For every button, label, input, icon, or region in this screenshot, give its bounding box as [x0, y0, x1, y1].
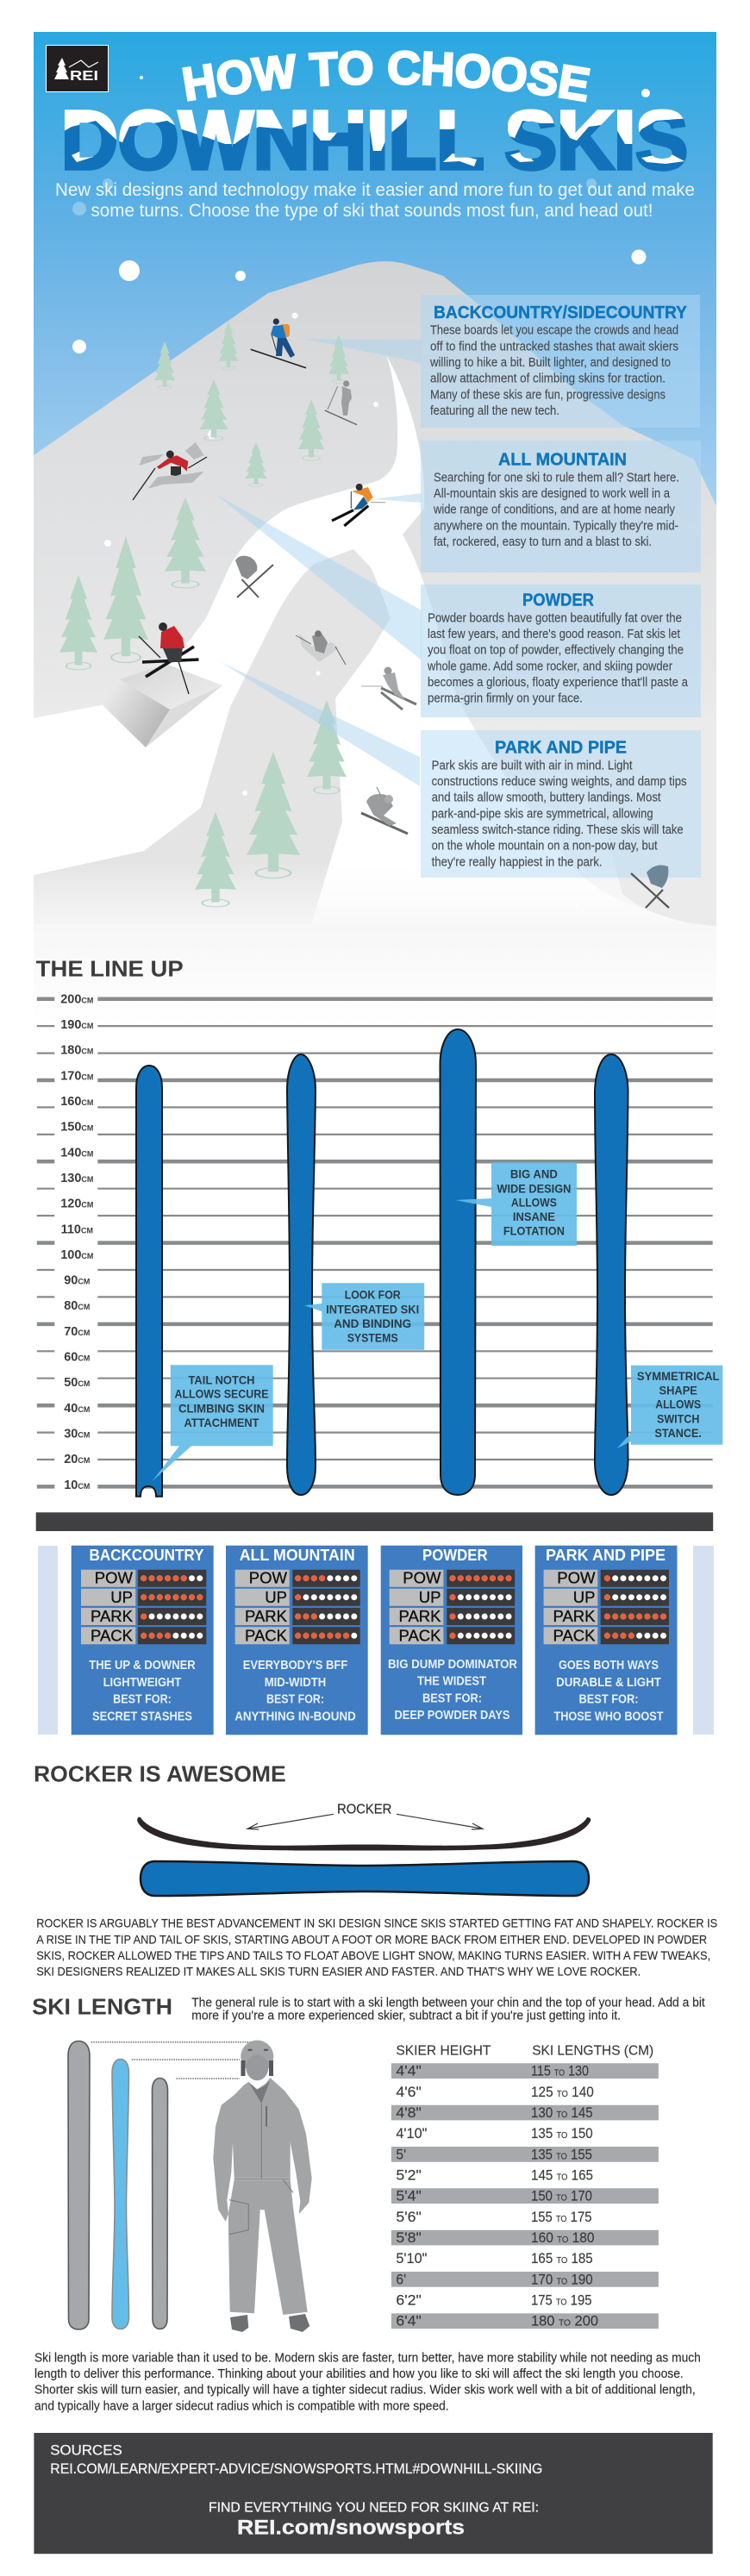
table: ski lengths: 160 TO 180 [531, 2229, 595, 2246]
chart: ruler labels: 10CM [64, 1479, 90, 1492]
chart: ruler labels: 60CM [64, 1350, 90, 1364]
table: ski lengths: SKI LENGTHS (CM) [532, 2043, 653, 2058]
panel: all mountain: All-mountain skis are designed to work well in a [434, 486, 671, 501]
panel: backcountry: willing to hike a bit. Built lighter, and designed to [429, 355, 671, 370]
panel: powder ratings card: PARK [398, 1607, 441, 1625]
ski: powder [440, 1029, 476, 1495]
right side grey strip [576, 718, 716, 926]
panel: park and pipe ratings card: PARK AND PIPE [546, 1546, 666, 1564]
skier: grey park [361, 787, 408, 834]
panel: powder: you float on top of powder, effectively changing the [428, 643, 684, 658]
table: ski lengths: 5'6" [396, 2209, 422, 2225]
callout: big and wide: FLOTATION [503, 1225, 565, 1238]
table: ski lengths: 135 TO 150 [531, 2125, 593, 2141]
panel: backcountry ratings card: POW [95, 1569, 134, 1587]
panel: backcountry ratings card: BACKCOUNTRY [90, 1546, 204, 1564]
table: ski lengths: SKIER HEIGHT [396, 2043, 491, 2058]
panel: backcountry: These boards let you escape the crowds and head [430, 323, 678, 338]
panel: all mountain ratings card: ALL MOUNTAIN [240, 1546, 355, 1564]
panel: all mountain ratings card: UP [265, 1588, 287, 1606]
trees [59, 322, 349, 907]
skier: red jumper [139, 622, 198, 694]
panel: park and pipe ratings card: UP [573, 1588, 595, 1606]
panel: all mountain ratings card: MID-WIDTH [265, 1676, 326, 1690]
panel: backcountry ratings card: PACK [91, 1626, 134, 1645]
heading: the line up: THE LINE UP [36, 955, 184, 981]
panel: powder: Powder boards have gotten beautifully fat over the [428, 610, 682, 625]
table: ski lengths: 4'6" [396, 2084, 422, 2100]
chart: ruler labels: 190CM [60, 1018, 93, 1032]
callout: big and wide [455, 1162, 577, 1246]
title: downhill skis [64, 109, 687, 172]
skier: grey touring [325, 380, 357, 425]
panel: park and pipe ratings card: BEST FOR: [579, 1693, 638, 1707]
panel: backcountry: Many of these skis are fun, progressive designs [430, 387, 666, 402]
skier: red in spray [133, 442, 207, 500]
chart: ruler labels: 40CM [64, 1402, 90, 1416]
skier: grey-blue bottom [631, 866, 669, 908]
chart: ruler labels: 90CM [64, 1274, 90, 1288]
table: ski lengths: 6'4" [396, 2313, 422, 2329]
callout: look for [304, 1283, 424, 1350]
panel: powder ratings card: BIG DUMP DOMINATOR [388, 1658, 517, 1672]
panel: park and pipe ratings card: GOES BOTH WAYS [559, 1659, 659, 1673]
panel: all mountain ratings card [226, 1546, 368, 1735]
panel: all mountain ratings card: POW [249, 1569, 288, 1587]
table: ski lengths: 170 TO 190 [531, 2271, 593, 2287]
arrows [247, 1814, 483, 1829]
panel: park and pipe ratings card [535, 1546, 678, 1735]
ski length intro [191, 1995, 706, 2023]
ski length paragraph: Ski length is more variable than it used to be. Modern skis are faster, turn better, have more stability while not needing as much [34, 2350, 701, 2365]
chart: ruler labels: 160CM [60, 1095, 93, 1109]
table: ski lengths: 5'10" [396, 2250, 427, 2267]
white ski run [34, 355, 690, 924]
ski: backcountry [136, 1066, 162, 1497]
table: ski lengths: 145 TO 165 [531, 2167, 593, 2184]
side strip left [38, 1546, 58, 1735]
chart: ruler labels: 20CM [64, 1453, 90, 1466]
call to action: FIND EVERYTHING YOU NEED FOR SKIING AT REI: [209, 2500, 539, 2515]
table: ski lengths: 135 TO 155 [531, 2146, 592, 2162]
panel: backcountry ratings card: LIGHTWEIGHT [103, 1676, 181, 1690]
table: ski lengths [391, 2043, 659, 2329]
panel: powder: last few years, and there's good reason. Fat skis let [428, 627, 681, 641]
chart: ruler labels: 30CM [64, 1428, 90, 1441]
rocker paragraph: SKIS, ROCKER ALLOWED THE TIPS AND TAILS TO FLOAT ABOVE LIGHT SNOW, MAKING TURNS EASIER. WITH A FEW TWEAKS, [36, 1948, 710, 1962]
jacket [213, 2078, 312, 2222]
chart: ruler labels: 50CM [64, 1376, 90, 1390]
panel: park and pipe: park-and-pipe skis are symmetrical, allowing [432, 806, 653, 821]
icon: REI logo [47, 45, 109, 91]
panel: powder ratings card: UP [419, 1588, 441, 1606]
chart: ruler labels: 120CM [60, 1197, 93, 1211]
callout: big and wide: BIG AND [510, 1168, 558, 1181]
panel: backcountry ratings card: PARK [91, 1607, 134, 1625]
callout: symmetrical: SYMMETRICAL [637, 1370, 719, 1383]
panel: backcountry ratings card: THE UP & DOWNER [89, 1659, 196, 1673]
panel: all mountain ratings card: BEST FOR: [266, 1693, 324, 1707]
sky background [34, 32, 716, 566]
panel: all mountain [421, 441, 701, 572]
callout: symmetrical: SHAPE [659, 1384, 697, 1397]
callout: big and wide: INSANE [513, 1210, 555, 1223]
panel: park and pipe: and tails allow smooth, buttery landings. Most [432, 791, 661, 805]
panel: park and pipe [421, 730, 701, 878]
skis by height [68, 2041, 167, 2329]
helmet [241, 2040, 273, 2073]
callout: look for: SYSTEMS [347, 1331, 398, 1344]
ski length intro: more if you're a more experienced skier, subtract a bit if you're just getting into it. [191, 2009, 621, 2023]
label: rocker: ROCKER [337, 1802, 391, 1816]
panel: park and pipe ratings card: PACK [553, 1626, 596, 1645]
panel: all mountain: ALL MOUNTAIN [498, 449, 627, 469]
ski length paragraph [34, 2350, 701, 2414]
callout: tail notch: ATTACHMENT [184, 1416, 259, 1429]
chart: ruler labels: 180CM [60, 1044, 93, 1058]
rocker paragraph [36, 1916, 717, 1979]
panel: backcountry: BACKCOUNTRY/SIDECOUNTRY [434, 303, 687, 322]
panel: all mountain: wide range of conditions, and are at home nearly [433, 503, 675, 517]
table: ski lengths: 6' [396, 2271, 406, 2287]
callout: tail notch: ALLOWS SECURE [174, 1388, 269, 1401]
table: ski lengths: 125 TO 140 [531, 2084, 594, 2100]
dotted guide lines [91, 2042, 252, 2079]
table: ski lengths: 6'2" [396, 2292, 422, 2309]
icon: REI logo: REI [70, 69, 98, 84]
panel: all mountain: fat, rockered, easy to turn and a blast to ski. [434, 535, 652, 549]
panel: all mountain ratings card: ANYTHING IN-BOUND [234, 1710, 356, 1723]
title: downhill skis: DOWNHILL SKIS [61, 95, 688, 186]
skier: backcountry blue [251, 318, 306, 368]
panel: powder [421, 585, 701, 717]
panel: all mountain ratings card: PACK [245, 1626, 288, 1645]
panel: park and pipe: Park skis are built with air in mind. Light [432, 758, 633, 772]
panel: all mountain ratings card: EVERYBODY'S BFF [243, 1659, 347, 1673]
panel: powder ratings card: POW [403, 1569, 441, 1587]
callout: look for: INTEGRATED SKI [326, 1303, 419, 1316]
panel: all mountain: anywhere on the mountain. Typically they're mid- [434, 518, 678, 533]
panel: park and pipe: they're really happiest in the park. [432, 854, 603, 869]
chart: ruler labels [60, 992, 93, 1492]
panel: park and pipe: seamless switch-stance riding. These skis will take [432, 822, 684, 837]
chart: ruler labels: 130CM [60, 1172, 93, 1185]
panel: park and pipe ratings card: PARK [553, 1607, 596, 1625]
panel: backcountry: off to find the untracked stashes that await skiers [430, 340, 678, 354]
title: downhill skis: DOWNHILL SKIS [61, 95, 688, 186]
sources: SOURCES [50, 2442, 122, 2459]
ski length paragraph: length to deliver this performance. Thinking about your abilities and how you like to ski will affect the ski length you choose. [34, 2367, 684, 2381]
panel: powder ratings card: BEST FOR: [422, 1691, 482, 1705]
callout: symmetrical [617, 1366, 722, 1448]
heading: ski length: SKI LENGTH [32, 1994, 172, 2020]
table: ski lengths: 4'4" [396, 2063, 422, 2079]
panel: park and pipe: PARK AND PIPE [495, 737, 627, 757]
callout: tail notch: CLIMBING SKIN [178, 1402, 265, 1415]
panel: all mountain ratings card: PARK [245, 1607, 288, 1625]
chart: ruler labels: 100CM [60, 1248, 93, 1262]
panel: park and pipe ratings card: POW [557, 1569, 596, 1587]
ski: park and pipe [595, 1054, 628, 1495]
panel: backcountry: featuring all the new tech. [430, 403, 559, 418]
chart: ruler grid [37, 999, 713, 1486]
lower fade [34, 862, 716, 1026]
dark divider bar [36, 1512, 713, 1531]
rocker paragraph: SKI DESIGNERS REALIZED IT MAKES ALL SKIS TURN EASIER AND FASTER. AND THAT'S WHY WE LOVE ROCKER. [36, 1965, 641, 1979]
chart: ruler labels: 150CM [60, 1121, 93, 1135]
ski length paragraph: Shorter skis will turn easier, and typically will have a tighter sidecut radius. Wider skis work well with a bit of additional length, [34, 2383, 696, 2398]
heading: rocker is awesome: ROCKER IS AWESOME [34, 1761, 286, 1787]
title: how to choose: HOW TO CHOOSE [182, 50, 591, 103]
table: ski lengths: 5'8" [396, 2229, 422, 2246]
table: ski lengths: 5' [396, 2146, 406, 2162]
panel: backcountry: allow attachment of climbing skins for traction. [430, 372, 666, 386]
grey run band [34, 549, 391, 924]
callout: look for: AND BINDING [334, 1317, 411, 1330]
skier: grey carving [361, 667, 416, 710]
table: ski lengths: 175 TO 195 [531, 2292, 591, 2309]
ski: all mountain [287, 1054, 316, 1495]
side strip right [693, 1546, 714, 1735]
panel: backcountry ratings card [72, 1546, 214, 1735]
panel: powder: becomes a glorious, floaty experience that'll paste a [428, 675, 689, 690]
table: ski lengths: 5'4" [396, 2188, 422, 2204]
chart: ruler labels: 200CM [60, 992, 93, 1006]
panel: backcountry ratings card: BEST FOR: [113, 1693, 172, 1707]
table: ski lengths: 115 TO 130 [531, 2063, 589, 2079]
source url: REI.COM/LEARN/EXPERT-ADVICE/SNOWSPORTS.HTML#DOWNHILL-SKIING [50, 2461, 542, 2477]
skier: orange [332, 484, 385, 526]
panel: powder ratings card: POWDER [422, 1546, 488, 1564]
intro text [55, 180, 695, 221]
skier: grey crossing skis [235, 556, 273, 597]
table: ski lengths: 180 TO 200 [531, 2313, 598, 2329]
panel: powder: whole game. Add some rocker, and skiing powder [427, 659, 672, 673]
collar [248, 2080, 270, 2104]
panel: backcountry ratings card: SECRET STASHES [92, 1710, 192, 1723]
callout: symmetrical: SWITCH [657, 1412, 699, 1425]
panel: park and pipe ratings card: DURABLE & LIGHT [556, 1676, 661, 1690]
chart: ruler labels: 170CM [60, 1069, 93, 1083]
ski top view [141, 1861, 589, 1896]
table: ski lengths: 165 TO 185 [531, 2250, 593, 2267]
panel: park and pipe: on the whole mountain on a non-pow day, but [432, 839, 658, 853]
panel: backcountry [421, 295, 700, 428]
panel: powder ratings card: PACK [398, 1626, 441, 1645]
rocker paragraph: A RISE IN THE TIP AND TAIL OF SKIS, STARTING ABOUT A FOOT OR MORE BACK FROM EITHER END. DEVELOPED IN POWDER [36, 1932, 707, 1946]
callout: big and wide: ALLOWS [511, 1197, 557, 1210]
panel: powder ratings card: THE WIDEST [417, 1675, 486, 1689]
callout: symmetrical: ALLOWS [655, 1398, 701, 1411]
panel: powder: POWDER [522, 591, 594, 610]
skier: grey in spray [296, 630, 346, 665]
chart: ruler labels: 70CM [64, 1325, 90, 1339]
panel: powder ratings card [381, 1546, 522, 1735]
pointer rays [216, 339, 422, 786]
callout: symmetrical: STANCE. [655, 1427, 702, 1440]
table: ski lengths: 150 TO 170 [531, 2188, 592, 2204]
ski length intro: The general rule is to start with a ski length between your chin and the top of your head. Add a bit [191, 1995, 706, 2010]
intro text: some turns. Choose the type of ski that sounds most fun, and head out! [91, 201, 653, 221]
ski side profile [137, 1817, 591, 1851]
panel: powder: perma-grin firmly on your face. [428, 691, 583, 706]
panel: park and pipe ratings card: THOSE WHO BOOST [553, 1710, 664, 1723]
figure: skier [213, 2040, 312, 2332]
mountain [34, 261, 716, 966]
panel: powder ratings card: DEEP POWDER DAYS [395, 1709, 510, 1723]
ski length paragraph: and typically have a larger sidecut radius which is compatible with more speed. [34, 2399, 449, 2414]
rei url: REI.com/snowsports [237, 2516, 465, 2539]
table: ski lengths: 155 TO 175 [531, 2209, 591, 2225]
callout: tail notch: TAIL NOTCH [188, 1373, 255, 1386]
panel: all mountain: Searching for one ski to rule them all? Start here. [434, 470, 679, 485]
table: ski lengths: 4'8" [396, 2104, 422, 2121]
rocker diagram [137, 1802, 591, 1896]
panel: hero scene [34, 32, 716, 1026]
callout: tail notch [153, 1365, 273, 1481]
boots [230, 2314, 309, 2332]
callout: big and wide: WIDE DESIGN [497, 1182, 571, 1195]
panel: backcountry ratings card: UP [110, 1588, 133, 1606]
table: ski lengths: 130 TO 145 [531, 2104, 593, 2121]
chart: ruler labels: 110CM [61, 1222, 93, 1236]
table: ski lengths: 4'10" [396, 2125, 427, 2141]
chart: ruler labels: 80CM [64, 1299, 90, 1313]
panel: park and pipe: constructions reduce swing weights, and damp tips [432, 774, 687, 789]
jump box [102, 664, 222, 747]
callout: look for: LOOK FOR [345, 1289, 401, 1302]
panel: footer [34, 2433, 713, 2554]
pants [228, 2179, 308, 2315]
intro text: New ski designs and technology make it easier and more fun to get out and make [55, 180, 695, 200]
table: ski lengths: 5'2" [396, 2167, 422, 2184]
snowflakes [72, 76, 650, 907]
chart: ruler labels: 140CM [60, 1146, 93, 1160]
